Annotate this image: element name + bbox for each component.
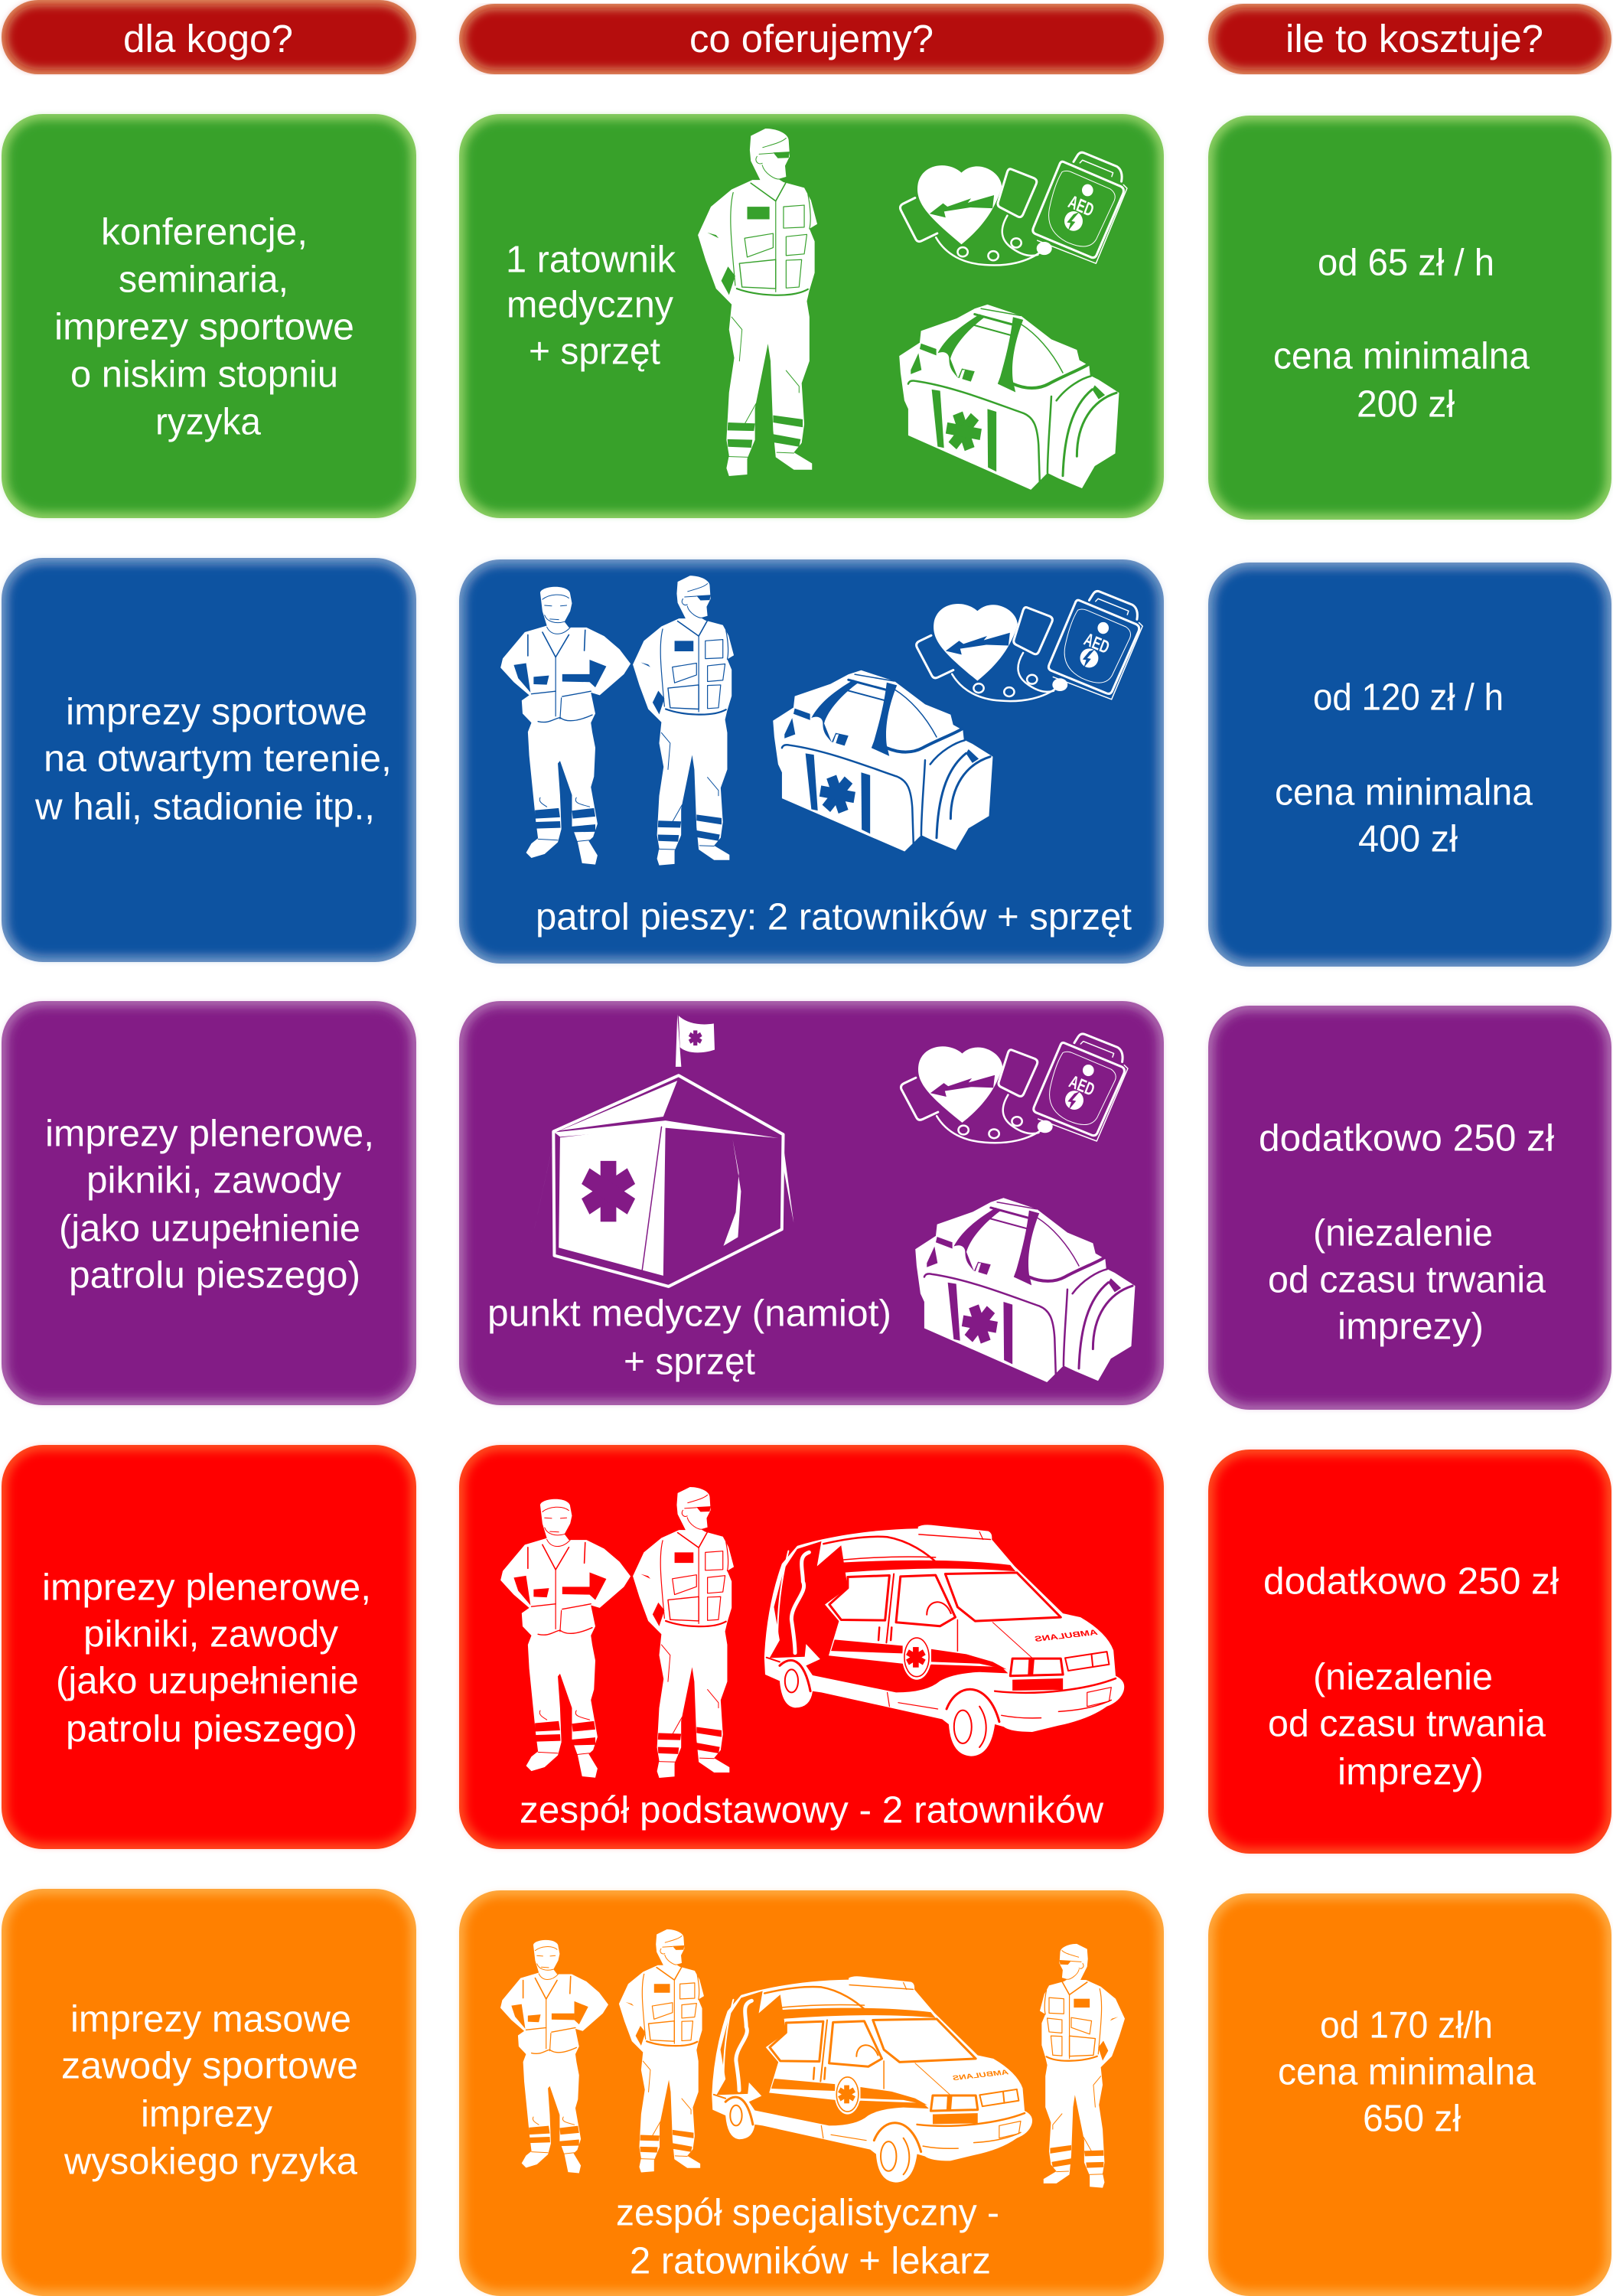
icon: paramedic with sunglasses	[619, 1929, 704, 2173]
text: row 3 audience: patrolu pieszego)	[69, 1255, 360, 1296]
icon: ambulance: AMBULANS	[1033, 1628, 1099, 1643]
icon: paramedic with sunglasses	[633, 576, 734, 866]
text: row 4 price	[1263, 1561, 1559, 1792]
text: row 4 audience: imprezy plenerowe,	[42, 1567, 371, 1609]
icon: paramedic hands on hips	[500, 1499, 631, 1778]
icon: AED defibrillator: AED	[1067, 1071, 1097, 1100]
icon: AED defibrillator	[901, 1034, 1128, 1143]
text: row 1 audience	[54, 211, 354, 442]
text: row 4 audience: patrolu pieszego)	[66, 1708, 357, 1750]
header: ile to kosztuje?	[1208, 4, 1611, 74]
text: row 1 price: cena minimalna	[1273, 335, 1530, 377]
panel: row 1 audience	[2, 114, 416, 518]
text: row 1 audience: ryzyka	[155, 401, 262, 442]
panel: row 5 audience	[2, 1889, 416, 2296]
text: row 2 audience	[34, 692, 392, 828]
text: row 4 price: (niezalenie	[1313, 1656, 1493, 1698]
header: co oferujemy?: co oferujemy?	[689, 17, 934, 60]
icon: ambulance: AMBULANS	[951, 2068, 1009, 2082]
header: dla kogo?	[2, 0, 416, 74]
text: row 3 audience: pikniki, zawody	[86, 1160, 342, 1202]
panel: row 4 offer	[459, 1445, 1164, 1849]
icon: ambulance	[764, 1525, 1124, 1756]
icon: AED defibrillator: AED	[1066, 191, 1097, 220]
text: row 1 offer: + sprzęt	[529, 331, 660, 372]
text: row 5 audience: imprezy	[141, 2094, 272, 2135]
text: row 5 price: cena minimalna	[1278, 2051, 1536, 2092]
panel: row 1 price	[1208, 116, 1611, 520]
icon: paramedic hands on hips	[500, 587, 631, 865]
header: dla kogo?: dla kogo?	[123, 17, 293, 60]
text: row 4 price: imprezy)	[1338, 1751, 1484, 1792]
text: row 5 offer: 2 ratowników + lekarz	[630, 2241, 991, 2282]
text: row 4 audience	[42, 1567, 371, 1750]
panel: row 4 audience	[2, 1445, 416, 1849]
text: row 5 price	[1278, 2005, 1536, 2140]
header: co oferujemy?	[459, 4, 1164, 74]
text: row 2 price: od 120 zł / h	[1313, 677, 1504, 718]
text: row 3 audience: imprezy plenerowe,	[45, 1113, 374, 1154]
icon: medical bag	[915, 1198, 1135, 1382]
icon: medical bag	[899, 305, 1119, 490]
text: row 5 price: od 170 zł/h	[1320, 2005, 1493, 2047]
text: row 3 audience	[45, 1113, 374, 1296]
text: row 3 price: imprezy)	[1338, 1306, 1484, 1347]
icon: ambulance	[712, 1976, 1032, 2183]
text: row 1 audience: konferencje,	[101, 211, 308, 253]
text: row 5 offer: zespół specjalistyczny -	[616, 2192, 999, 2233]
text: row 5 audience: wysokiego ryzyka	[64, 2141, 358, 2183]
text: row 4 price: dodatkowo 250 zł	[1263, 1561, 1559, 1603]
text: row 1 offer	[506, 239, 676, 372]
icon: medical tent with flag	[530, 1014, 793, 1287]
text: row 1 offer: 1 ratownik	[506, 239, 676, 280]
text: row 2 audience: w hali, stadionie itp.,	[34, 787, 375, 828]
text: row 2 audience: imprezy sportowe	[66, 692, 367, 733]
text: row 4 audience: (jako uzupełnienie	[56, 1661, 359, 1702]
text: row 1 price: 200 zł	[1357, 384, 1455, 426]
text: row 5 price: 650 zł	[1363, 2099, 1461, 2140]
text: row 4 offer: zespół podstawowy - 2 ratowników	[520, 1789, 1104, 1831]
icon: paramedic hands on hips	[500, 1940, 608, 2174]
text: row 5 audience: zawody sportowe	[61, 2045, 358, 2086]
text: row 2 audience: na otwartym terenie,	[44, 738, 392, 779]
icon: paramedic with sunglasses	[633, 1487, 734, 1778]
text: row 3 price	[1259, 1117, 1554, 1347]
icon: AED defibrillator: AED	[1081, 628, 1113, 657]
text: row 3 offer	[487, 1293, 891, 1382]
text: row 2 price: cena minimalna	[1275, 771, 1533, 813]
text: row 3 offer: punkt medyczy (namiot)	[487, 1293, 891, 1335]
text: row 1 price: od 65 zł / h	[1318, 242, 1494, 283]
header: ile to kosztuje?: ile to kosztuje?	[1286, 17, 1543, 60]
panel: row 2 price	[1208, 563, 1611, 967]
text: row 4 audience: pikniki, zawody	[83, 1613, 339, 1655]
panel: row 4 price	[1208, 1450, 1611, 1854]
panel: row 3 offer	[459, 1001, 1164, 1405]
text: row 3 price: dodatkowo 250 zł	[1259, 1117, 1554, 1159]
panel: row 1 offer	[459, 114, 1164, 518]
icon: medical bag	[773, 670, 992, 852]
text: row 2 price	[1275, 677, 1533, 860]
icon: paramedic	[698, 129, 817, 476]
text: row 2 price: 400 zł	[1358, 819, 1458, 860]
text: row 1 offer: medyczny	[507, 285, 673, 326]
text: row 3 price: (niezalenie	[1313, 1212, 1493, 1254]
text: row 3 offer: + sprzęt	[624, 1341, 755, 1382]
panel: row 2 audience	[2, 558, 416, 962]
text: row 3 audience: (jako uzupełnienie	[59, 1208, 360, 1249]
text: row 5 audience: imprezy masowe	[70, 1999, 351, 2040]
text: row 5 audience	[61, 1999, 358, 2183]
icon: AED defibrillator	[900, 152, 1127, 266]
text: row 5 offer	[616, 2192, 999, 2282]
text: row 4 price: od czasu trwania	[1268, 1704, 1546, 1745]
text: row 2 offer: patrol pieszy: 2 ratowników + sprzęt	[536, 897, 1132, 938]
icon: doctor	[1040, 1944, 1125, 2188]
text: row 3 price: od czasu trwania	[1268, 1260, 1546, 1301]
panel: row 3 price	[1208, 1006, 1611, 1410]
text: row 1 audience: seminaria,	[119, 259, 288, 300]
panel: row 2 offer	[459, 559, 1164, 964]
text: row 1 audience: o niskim stopniu	[70, 354, 338, 395]
panel: row 3 audience	[2, 1001, 416, 1405]
panel: row 5 offer	[459, 1890, 1164, 2296]
text: row 1 audience: imprezy sportowe	[54, 306, 354, 347]
text: row 1 price	[1273, 242, 1530, 426]
icon: AED defibrillator	[917, 591, 1142, 701]
panel: row 5 price	[1208, 1893, 1611, 2296]
